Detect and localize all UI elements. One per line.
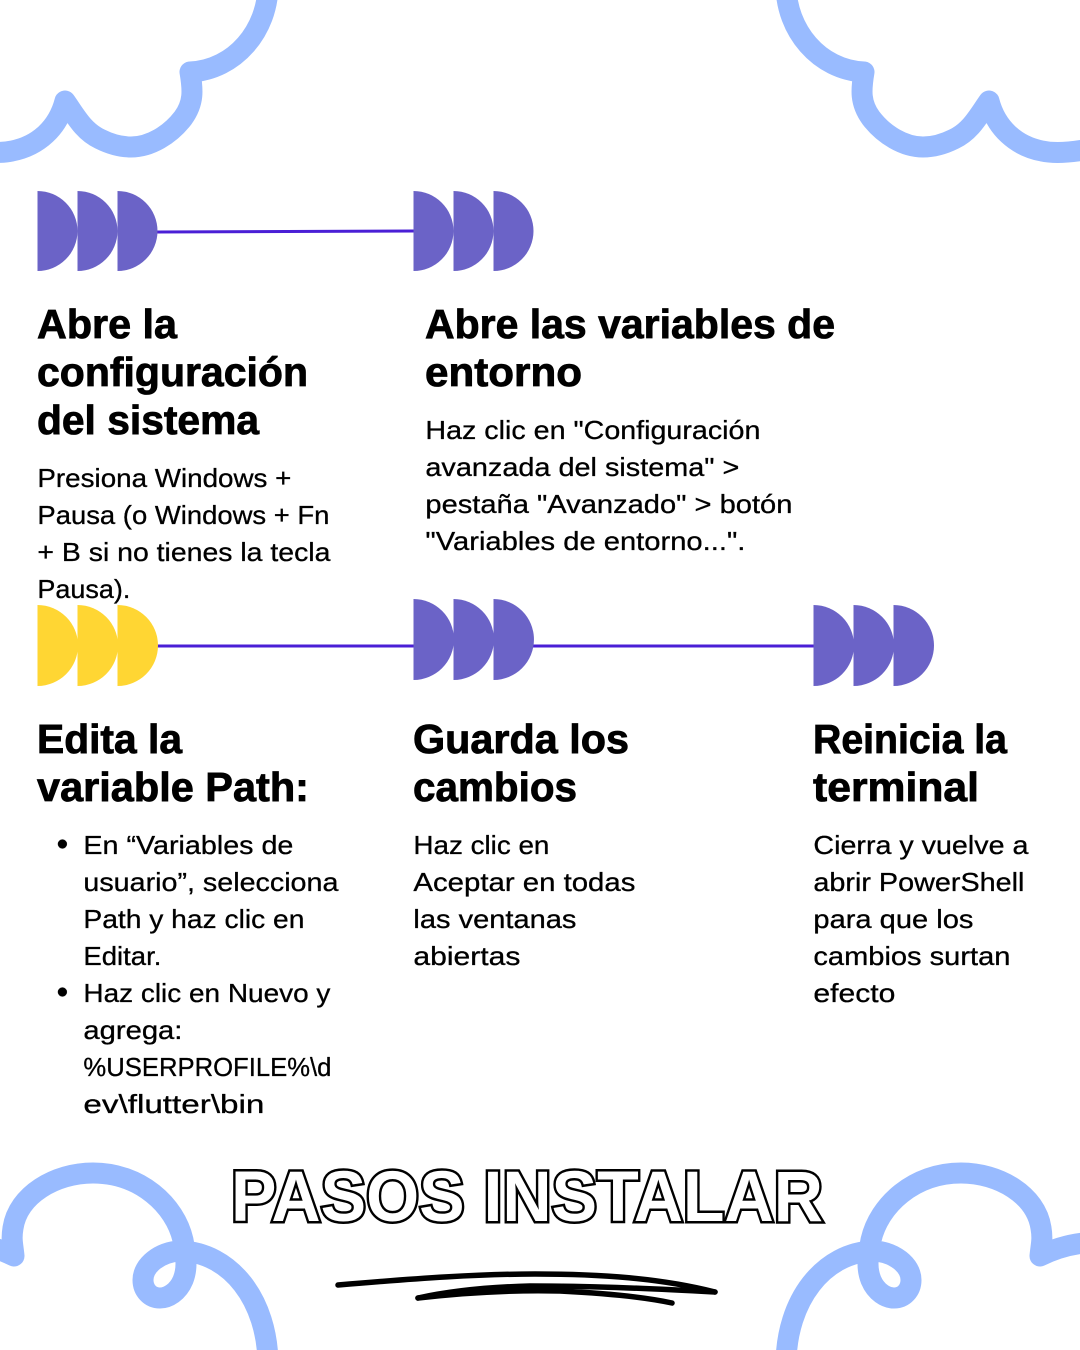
text: step 3 bullet list: %USERPROFILE%\d	[83, 1052, 331, 1082]
text: step 4 body: Aceptar en todas	[413, 867, 635, 897]
heading: step 2	[425, 301, 835, 395]
text: step 1 body: Presiona Windows +	[37, 463, 291, 493]
panel: step 1	[37, 191, 331, 604]
panel: step 5	[813, 605, 1029, 1008]
text: step 2 body: "Variables de entorno...".	[425, 526, 745, 556]
panel: step 2	[414, 191, 835, 556]
connector line: step 3 to step 4	[157, 644, 414, 648]
text: step 1 body: Pausa (o Windows + Fn	[37, 500, 329, 530]
text: step 1 body	[37, 463, 331, 604]
text: step 3 bullet list	[58, 830, 339, 1119]
decoration: top right cloud curve	[786, 0, 1080, 152]
heading: step 4	[413, 716, 629, 810]
decoration: bottom left loop curve	[0, 1173, 268, 1350]
text: step 4 body: Haz clic en	[413, 830, 549, 860]
text: step 2 body	[425, 415, 792, 556]
heading: step 3: Edita la	[37, 716, 183, 762]
text: step 5 body: abrir PowerShell	[813, 867, 1024, 897]
icon: step 4 half circles	[414, 599, 534, 680]
text: step 3 bullet list: agrega:	[83, 1015, 182, 1045]
text: step 3 bullet list: Editar.	[83, 941, 161, 971]
icon: step 2 half circles	[414, 191, 534, 271]
text: step 4 body: abiertas	[413, 941, 520, 971]
text: step 3 bullet list: Haz clic en Nuevo y	[83, 978, 330, 1008]
panel: step 4	[413, 599, 635, 971]
heading: step 5	[813, 716, 1008, 810]
heading: step 3: variable Path:	[37, 764, 309, 810]
text: step 3 bullet list: usuario”, selecciona	[83, 867, 339, 897]
text: step 5 body: efecto	[813, 978, 895, 1008]
text: step 4 body	[413, 830, 635, 971]
heading: step 1: Abre la	[37, 301, 178, 347]
text: step 2 body: pestaña "Avanzado" > botón	[425, 489, 792, 519]
text: step 3 bullet list: En “Variables de	[83, 830, 293, 860]
heading: step 5: terminal	[813, 764, 979, 810]
heading: step 2: Abre las variables de	[425, 301, 835, 347]
text: step 5 body: cambios surtan	[813, 941, 1010, 971]
text: step 5 body: Cierra y vuelve a	[813, 830, 1029, 860]
decoration: bottom right loop curve	[786, 1173, 1080, 1350]
decoration: black scribble underline	[338, 1274, 715, 1303]
text: step 2 body: avanzada del sistema" >	[425, 452, 739, 482]
icon: step 1 half circles	[38, 191, 158, 271]
heading: step 2: entorno	[425, 349, 582, 395]
heading: step 3	[37, 716, 309, 810]
text: step 1 body: Pausa).	[37, 574, 130, 604]
heading: step 4: Guarda los	[413, 716, 629, 762]
heading: step 5: Reinicia la	[813, 716, 1008, 762]
text: step 4 body: las ventanas	[413, 904, 576, 934]
connector line: step 1 to step 2	[157, 231, 414, 232]
text: step 5 body	[813, 830, 1029, 1008]
heading: step 4: cambios	[413, 764, 577, 810]
decoration: top left cloud curve	[0, 0, 268, 152]
title: outlined: PASOS INSTALAR	[231, 1158, 823, 1237]
heading: step 1	[37, 301, 308, 443]
connector line: step 4 to step 5	[533, 644, 814, 648]
text: step 3 bullet list: Path y haz clic en	[83, 904, 304, 934]
text: step 1 body: + B si no tienes la tecla	[37, 537, 331, 567]
panel: step 3	[37, 605, 339, 1119]
heading: step 1: configuración	[37, 349, 308, 395]
heading: step 1: del sistema	[37, 397, 260, 443]
icon: step 3 yellow half circles	[38, 605, 158, 686]
text: step 2 body: Haz clic en "Configuración	[425, 415, 760, 445]
text: step 3 bullet list: ev\flutter\bin	[83, 1089, 264, 1119]
text: step 5 body: para que los	[813, 904, 973, 934]
icon: step 5 half circles	[814, 605, 934, 686]
